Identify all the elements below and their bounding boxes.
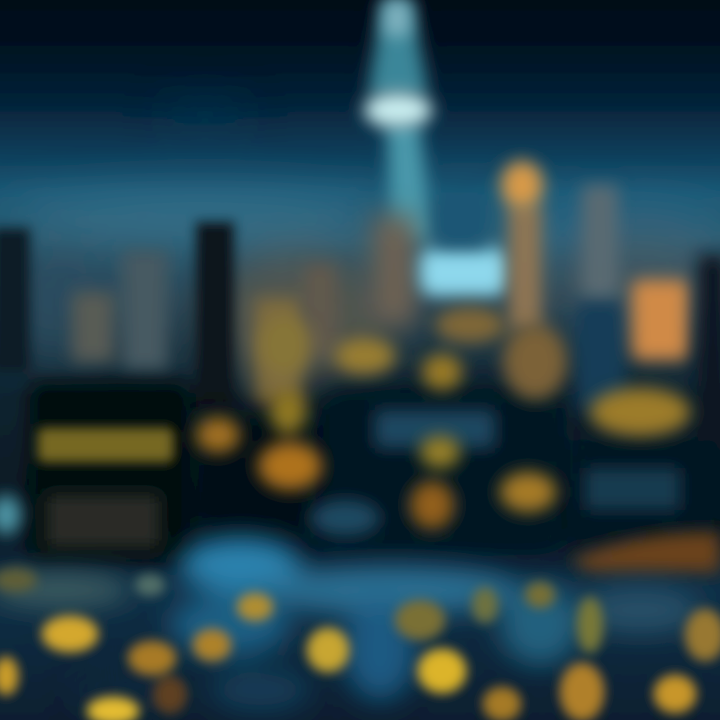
tower spire bbox=[368, 0, 428, 95]
pale left building bbox=[122, 250, 168, 370]
waterfront orange strip bbox=[570, 532, 720, 572]
left block yellow band bbox=[38, 428, 174, 462]
tower shaft bbox=[386, 125, 432, 240]
orange lit building bbox=[632, 280, 688, 360]
brown mid tower bbox=[305, 265, 335, 355]
orange tower top bbox=[501, 161, 543, 209]
tower base bbox=[372, 215, 416, 325]
amber lights in the city bbox=[196, 307, 690, 529]
blue tower below grey tower bbox=[575, 300, 625, 410]
far left dark tower bbox=[0, 228, 30, 373]
right blue band bbox=[585, 468, 680, 510]
dark blue band bbox=[375, 410, 495, 448]
small tan building bbox=[72, 292, 114, 362]
left dark tower bbox=[196, 222, 234, 412]
reflective plaza with blue tones bbox=[0, 537, 700, 714]
left dark block bbox=[30, 382, 190, 560]
grey tower bbox=[582, 185, 618, 305]
glowing blue building bbox=[420, 248, 508, 296]
foreground dark mass bbox=[0, 382, 720, 560]
small blue light bbox=[310, 500, 380, 536]
left block grey band bbox=[46, 494, 160, 548]
mid-ground buildings bbox=[0, 161, 720, 505]
distant skyline haze bbox=[0, 105, 720, 390]
tower spire core bbox=[384, 0, 410, 36]
central dark waterfront block bbox=[315, 385, 565, 550]
dark right building bbox=[698, 255, 720, 505]
left edge blue light bbox=[0, 495, 21, 535]
right dark block bbox=[575, 440, 720, 540]
central tower bbox=[364, 0, 432, 325]
tan tower bbox=[508, 205, 542, 330]
amber mid tower bbox=[255, 298, 301, 408]
yellow light spots in the foreground bbox=[0, 568, 720, 720]
dark column between blocks bbox=[190, 410, 315, 540]
dark teal tower behind bbox=[435, 200, 485, 248]
tower observation deck bbox=[364, 92, 432, 128]
